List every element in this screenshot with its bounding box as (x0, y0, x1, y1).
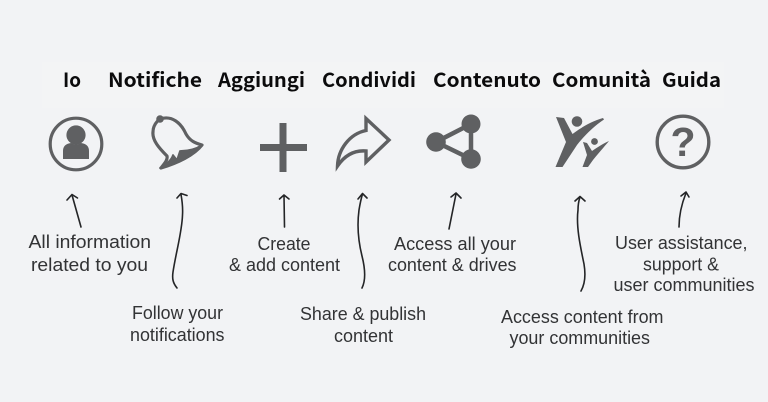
label: notifications: Follow your (132, 302, 223, 323)
heading: Guida: Guida (662, 64, 721, 93)
heading: Io: Io (63, 64, 81, 93)
label: create: & add content (229, 254, 340, 275)
label: communities: Access content from (501, 306, 664, 327)
label: user (28, 231, 151, 275)
label: help: user communities (614, 274, 754, 295)
arrow: plus (280, 195, 289, 227)
heading: Condividi: Condividi (322, 64, 416, 93)
label: help: support & (643, 254, 719, 274)
label: user: All information (28, 231, 151, 252)
label: create (229, 233, 340, 275)
label: content (388, 233, 516, 275)
icon: user (50, 118, 102, 170)
heading: Aggiungi: Aggiungi (217, 64, 305, 93)
label: communities (501, 306, 664, 348)
label: create: Create (258, 233, 310, 254)
icon: share arrow (338, 118, 389, 166)
arrow: bell (173, 194, 187, 288)
icon: help (657, 116, 709, 168)
label: notifications: notifications (130, 324, 224, 345)
arrow: content (449, 193, 461, 229)
heading: Contenuto: Contenuto (433, 64, 541, 93)
label: help: User assistance, (615, 232, 748, 253)
icon: content network (426, 114, 481, 169)
icon: plus (260, 123, 307, 172)
icon: bell (153, 115, 202, 168)
label: help (614, 232, 754, 295)
label: content: Access all your (394, 233, 516, 254)
label: communities: your communities (510, 327, 650, 348)
headings row (63, 64, 721, 93)
label: user: related to you (31, 254, 148, 275)
arrow: user (67, 194, 81, 227)
heading: Comunità: Comunità (552, 64, 651, 93)
label: notifications (130, 302, 224, 345)
label: content: content & drives (388, 254, 516, 275)
label: share: content (334, 325, 393, 346)
arrow: share (358, 194, 367, 288)
icon: community figures (556, 116, 609, 167)
label: share (300, 303, 426, 346)
heading: Notifiche: Notifiche (108, 64, 202, 93)
arrow: community (575, 196, 585, 291)
label: share: Share & publish (300, 303, 426, 324)
arrow: help (679, 192, 689, 227)
icon: help: ? (670, 119, 696, 165)
